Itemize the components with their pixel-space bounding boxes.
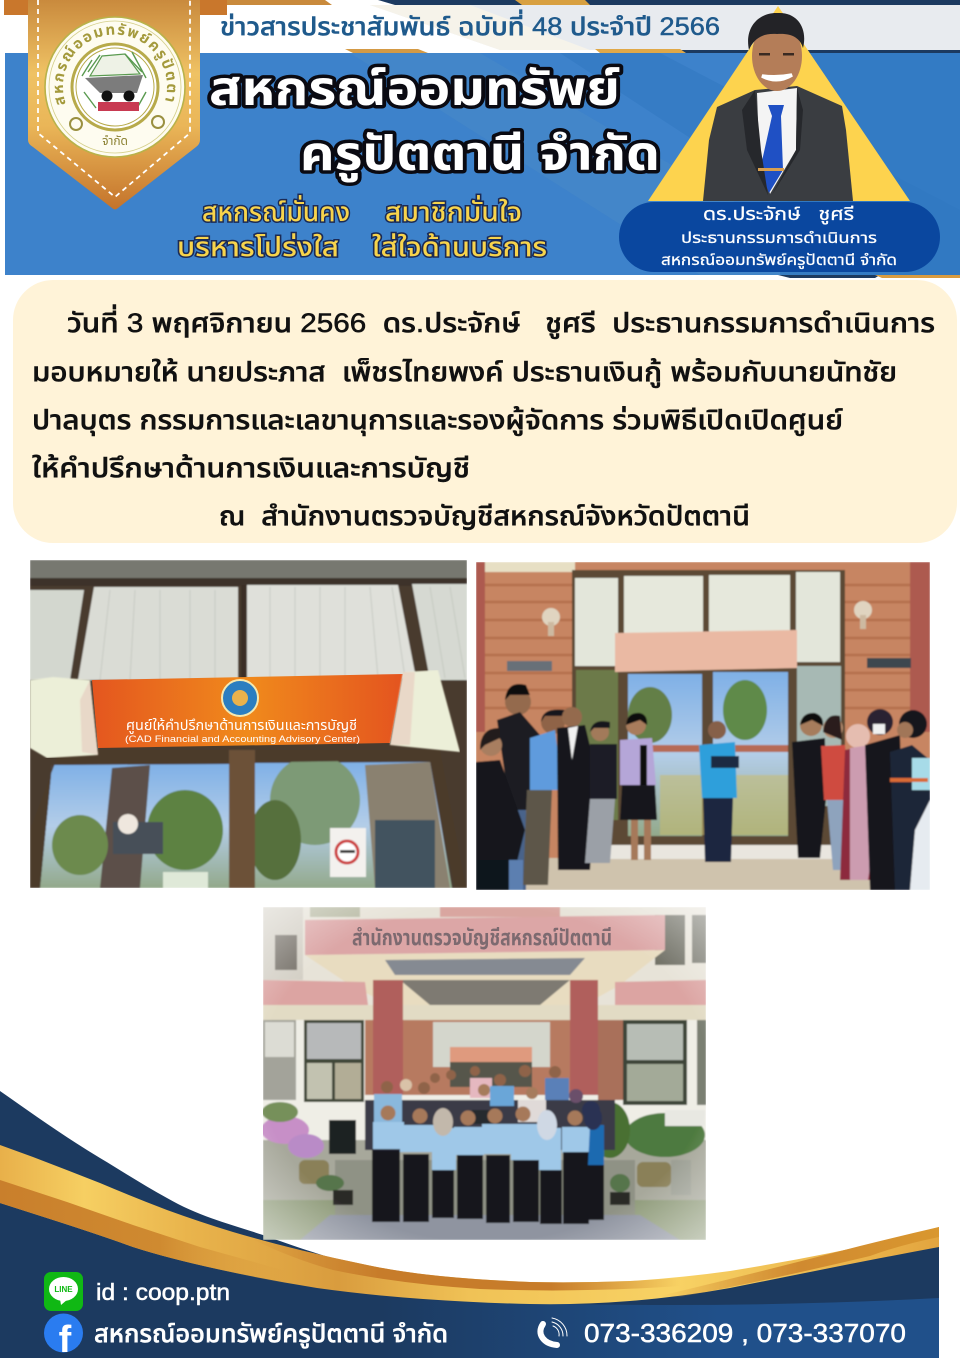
window left — [40, 764, 229, 888]
footer swoosh — [0, 1091, 939, 1358]
logo seal: จำกัด — [102, 134, 128, 148]
back rows — [365, 1065, 615, 1150]
sign board: (CAD Financial and Accounting Advisory Center) — [125, 734, 360, 745]
paragraph — [32, 304, 935, 531]
front row — [373, 1122, 590, 1170]
slogans: สหกรณ์มั่นคง — [202, 194, 350, 227]
header banner — [4, 0, 960, 278]
navy wave — [0, 1091, 939, 1358]
orange shade right — [660, 1227, 939, 1297]
photo: staff group in front of audit office — [261, 907, 706, 1240]
news text panel — [13, 280, 957, 543]
soffit — [305, 950, 665, 1010]
people — [497, 684, 540, 890]
flowers and pots — [261, 1116, 309, 1144]
paragraph: ณ สำนักงานตรวจบัญชีสหกรณ์จังหวัดปัตตานี — [219, 501, 750, 531]
slogans: บริหารโปร่งใส — [177, 232, 339, 262]
icon: Facebook — [44, 1314, 83, 1358]
blue background — [5, 53, 960, 275]
yellow triangle — [648, 6, 910, 201]
Facebook name: สหกรณ์ออมทรัพย์ครูปัตตานี จำกัด — [94, 1320, 448, 1349]
sign board — [92, 674, 403, 748]
sign board: ศูนย์ให้คำปรึกษาด้านการเงินและการบัญชี — [126, 718, 357, 734]
chairman name pill — [619, 202, 940, 272]
canopy — [305, 915, 665, 955]
drapes — [30, 670, 460, 758]
main title: สหกรณ์ออมทรัพย์ — [209, 63, 620, 116]
lighter navy base — [380, 1298, 939, 1358]
phone numbers: 073-336209 , 073-337070 — [584, 1318, 906, 1348]
orange shade middle — [250, 1238, 680, 1290]
paragraph: มอบหมายให้ นายประภาส เพ็ชรไทยพงค์ ประธานเงินกู้ พร้อมกับนายนัทชัย — [32, 357, 897, 388]
portrait of chairman — [703, 13, 853, 201]
pillars — [373, 980, 403, 1095]
icon: phone — [540, 1318, 567, 1345]
window right — [255, 762, 452, 888]
chairman name pill: ดร.ประจักษ์ ชูศรี — [703, 204, 854, 226]
slogans: ใส่ใจด้านบริการ — [372, 232, 547, 262]
photo: opening ceremony — [476, 562, 930, 890]
paragraph: วันที่ 3 พฤศจิกายน 2566 ดร.ประจักษ์ ชูศรี ประธานกรรมการดำเนินการ — [67, 304, 935, 339]
floor — [525, 857, 872, 890]
paragraph: ปาลบุตร กรรมการและเลขานุการและรองผู้จัดการ ร่วมพิธีเปิดเปิดศูนย์ — [32, 405, 843, 436]
slogans — [177, 194, 547, 262]
header strip — [5, 0, 960, 53]
door frames — [40, 754, 338, 876]
icon: LINE — [44, 1272, 83, 1311]
office signage: สำนักงานตรวจบัญชีสหกรณ์ปัตตานี — [352, 925, 612, 950]
valance — [615, 630, 797, 672]
ribbon with logo — [4, 0, 227, 210]
chairman name pill: สหกรณ์ออมทรัพย์ครูปัตตานี จำกัด — [661, 252, 897, 269]
side ledges — [263, 980, 368, 1005]
photo: advisory centre sign — [30, 560, 467, 888]
slogans: สมาชิกมั่นใจ — [385, 194, 522, 227]
paragraph: ให้คำปรึกษาด้านการเงินและการบัญชี — [32, 453, 470, 483]
footer contacts — [44, 1272, 906, 1358]
newsletter issue line: ข่าวสารประชาสัมพันธ์ ฉบับที่ 48 ประจำปี 2566 — [220, 9, 720, 41]
orange shade left — [0, 1180, 290, 1284]
logo seal — [44, 16, 186, 158]
ground — [263, 1139, 706, 1201]
chairman name pill: ประธานกรรมการดำเนินการ — [681, 230, 877, 247]
door and window frame — [572, 570, 845, 850]
gold wave — [0, 1145, 939, 1304]
main title — [209, 63, 660, 183]
lower wall — [263, 1020, 706, 1140]
vignette — [263, 907, 706, 1240]
LINE id: id : coop.ptn — [96, 1279, 230, 1305]
main title: ครูปัตตานี จำกัด — [300, 128, 660, 183]
icon: LINE: LINE — [54, 1285, 73, 1294]
